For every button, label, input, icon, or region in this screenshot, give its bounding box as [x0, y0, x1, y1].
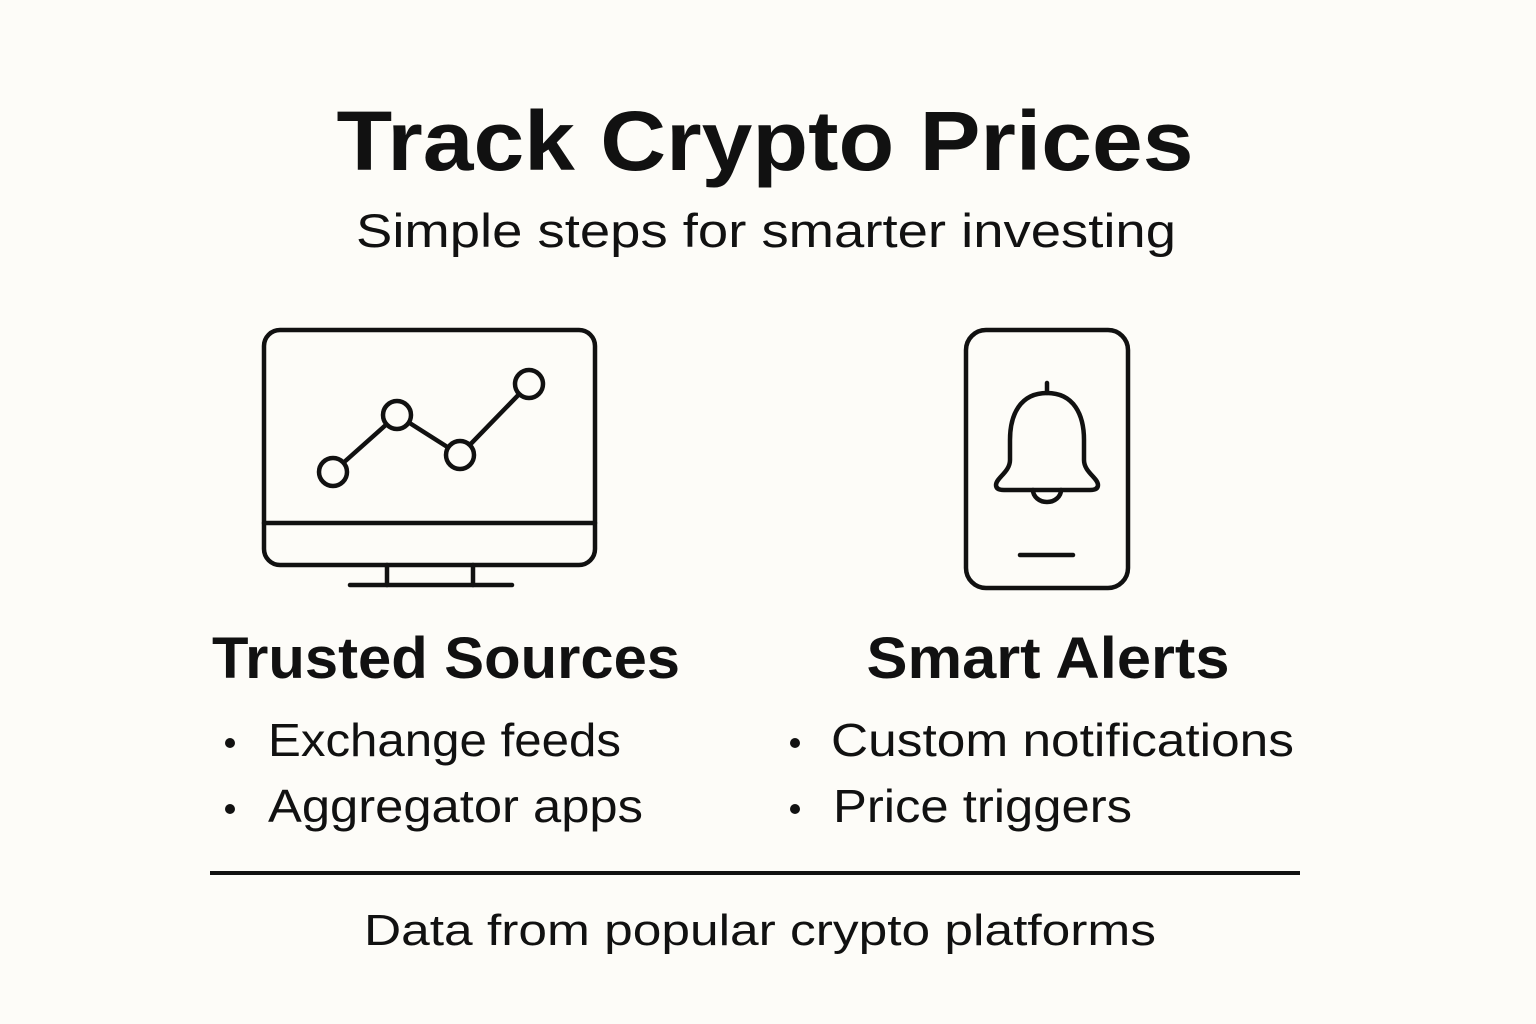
list: smart alerts: Custom notifications	[831, 714, 1294, 766]
list: trusted sources: Aggregator apps	[268, 780, 643, 832]
list: smart alerts: Price triggers	[833, 780, 1132, 832]
icon: phone with bell	[966, 330, 1128, 588]
heading: Smart Alerts: Smart Alerts	[866, 626, 1230, 691]
title: Track Crypto Prices	[336, 94, 1194, 188]
list: trusted sources: Exchange feeds	[268, 714, 621, 766]
footer: Data from popular crypto platforms	[364, 906, 1156, 955]
list: trusted sources	[225, 714, 643, 832]
heading: Trusted Sources: Trusted Sources	[212, 626, 680, 691]
list: smart alerts	[790, 714, 1294, 832]
icon: monitor with chart	[264, 330, 595, 585]
subtitle: Simple steps for smarter investing	[356, 204, 1176, 257]
